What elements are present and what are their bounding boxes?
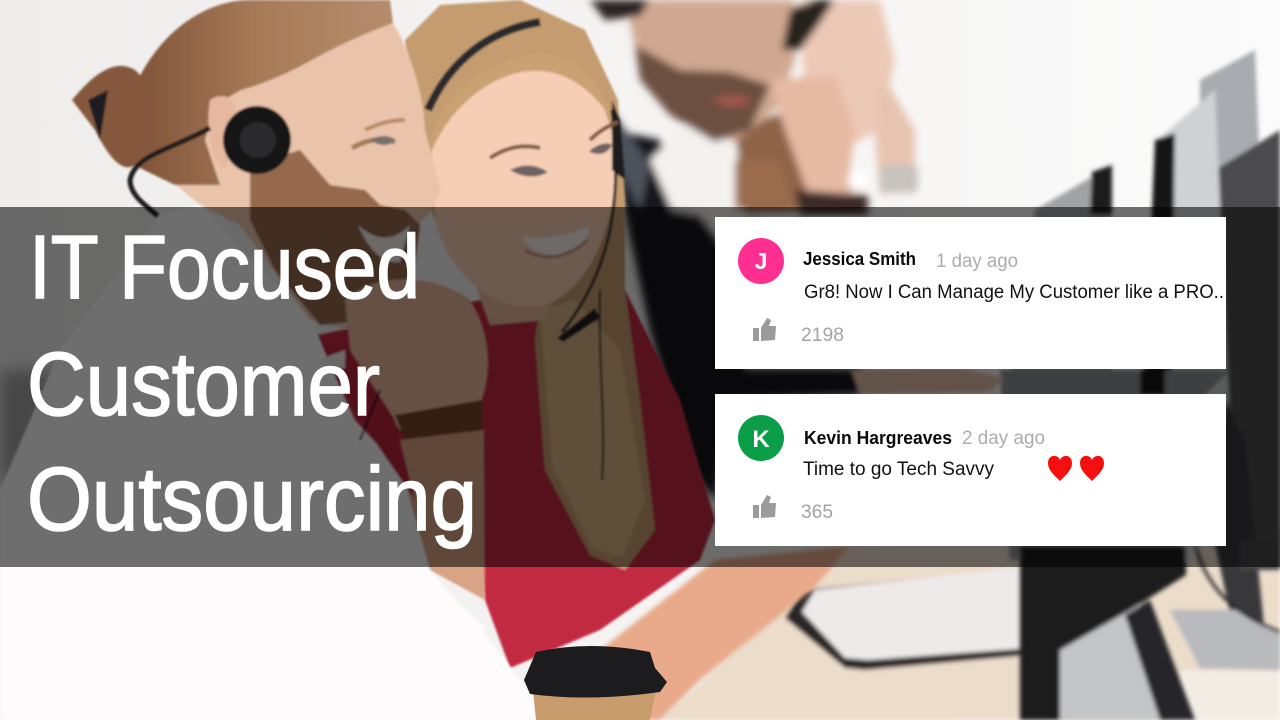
avatar: K: K (752, 426, 770, 453)
commenter name: Kevin Hargreaves (804, 428, 952, 448)
commenter name: Jessica Smith (803, 249, 916, 269)
forearm and reaching hand (600, 368, 1005, 720)
like count: 365 (801, 502, 833, 523)
back agents (590, 0, 918, 500)
comment text: Gr8! Now I Can Manage My Customer like a PRO.. (804, 282, 1224, 303)
monitors (1000, 50, 1280, 720)
timestamp: 1 day ago (936, 251, 1018, 272)
woman agent (318, 0, 715, 668)
icon: hearts (1048, 456, 1104, 481)
desk (660, 530, 1280, 720)
avatar: J: J (755, 248, 767, 274)
comment text: Time to go Tech Savvy (803, 459, 994, 480)
avatar: J (738, 238, 784, 284)
comment card: Kevin Hargreaves (715, 394, 1226, 546)
timestamp: 2 day ago (962, 428, 1045, 449)
comment card: Jessica Smith (715, 217, 1226, 369)
like count: 2198 (801, 325, 844, 346)
man agent (0, 0, 540, 720)
title: IT Focused (29, 218, 420, 318)
title: Customer (27, 335, 380, 435)
translucent title band (0, 207, 1280, 567)
title (27, 218, 477, 550)
icon: thumbs up (753, 495, 776, 518)
icon: thumbs up (753, 318, 776, 341)
coffee cup (524, 646, 667, 720)
title: Outsourcing (27, 450, 477, 550)
avatar: K (738, 415, 784, 461)
